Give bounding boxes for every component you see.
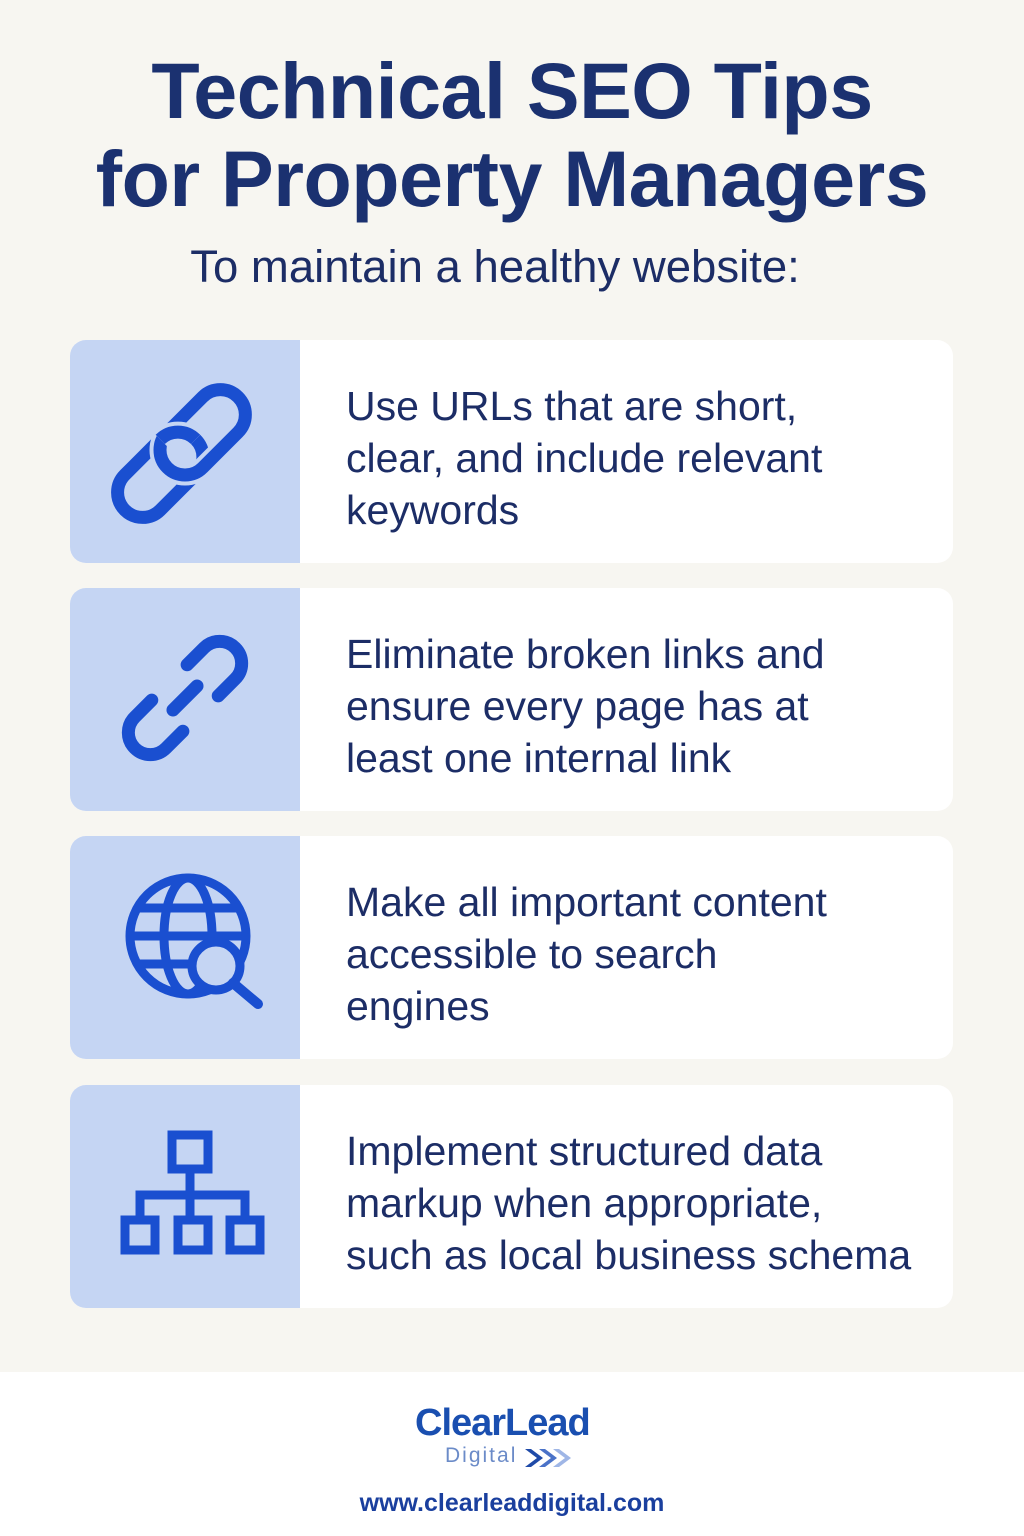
card 3 [70, 836, 953, 1059]
website url: www.clearleaddigital.com [360, 1489, 664, 1517]
card 4 [70, 1085, 953, 1308]
text: accessible to search [346, 931, 717, 977]
text: least one internal link [346, 735, 731, 781]
text: Use URLs that are short, [346, 383, 797, 429]
card 2 [70, 588, 953, 811]
icon: broken link [70, 588, 300, 811]
text [346, 383, 822, 533]
text: ensure every page has at [346, 683, 809, 729]
title: for Property Managers [96, 134, 928, 223]
text [346, 1128, 912, 1278]
text [346, 631, 825, 781]
text: keywords [346, 487, 519, 533]
subtitle: To maintain a healthy website: [190, 241, 800, 292]
logo: Digital [445, 1444, 517, 1467]
text [346, 879, 827, 1029]
text: Make all important content [346, 879, 827, 925]
footer [0, 1372, 1024, 1536]
title: Technical SEO Tips [151, 46, 873, 135]
card 1 [70, 340, 953, 563]
text: such as local business schema [346, 1232, 911, 1278]
text: markup when appropriate, [346, 1180, 822, 1226]
logo: ClearLead [415, 1402, 590, 1444]
icon: chain link [70, 340, 300, 563]
icon: globe search [70, 836, 300, 1059]
text: Implement structured data [346, 1128, 822, 1174]
text: clear, and include relevant [346, 435, 822, 481]
title [96, 46, 928, 223]
text: engines [346, 983, 490, 1029]
icon: sitemap [70, 1085, 300, 1308]
text: Eliminate broken links and [346, 631, 825, 677]
logo [415, 1402, 590, 1467]
